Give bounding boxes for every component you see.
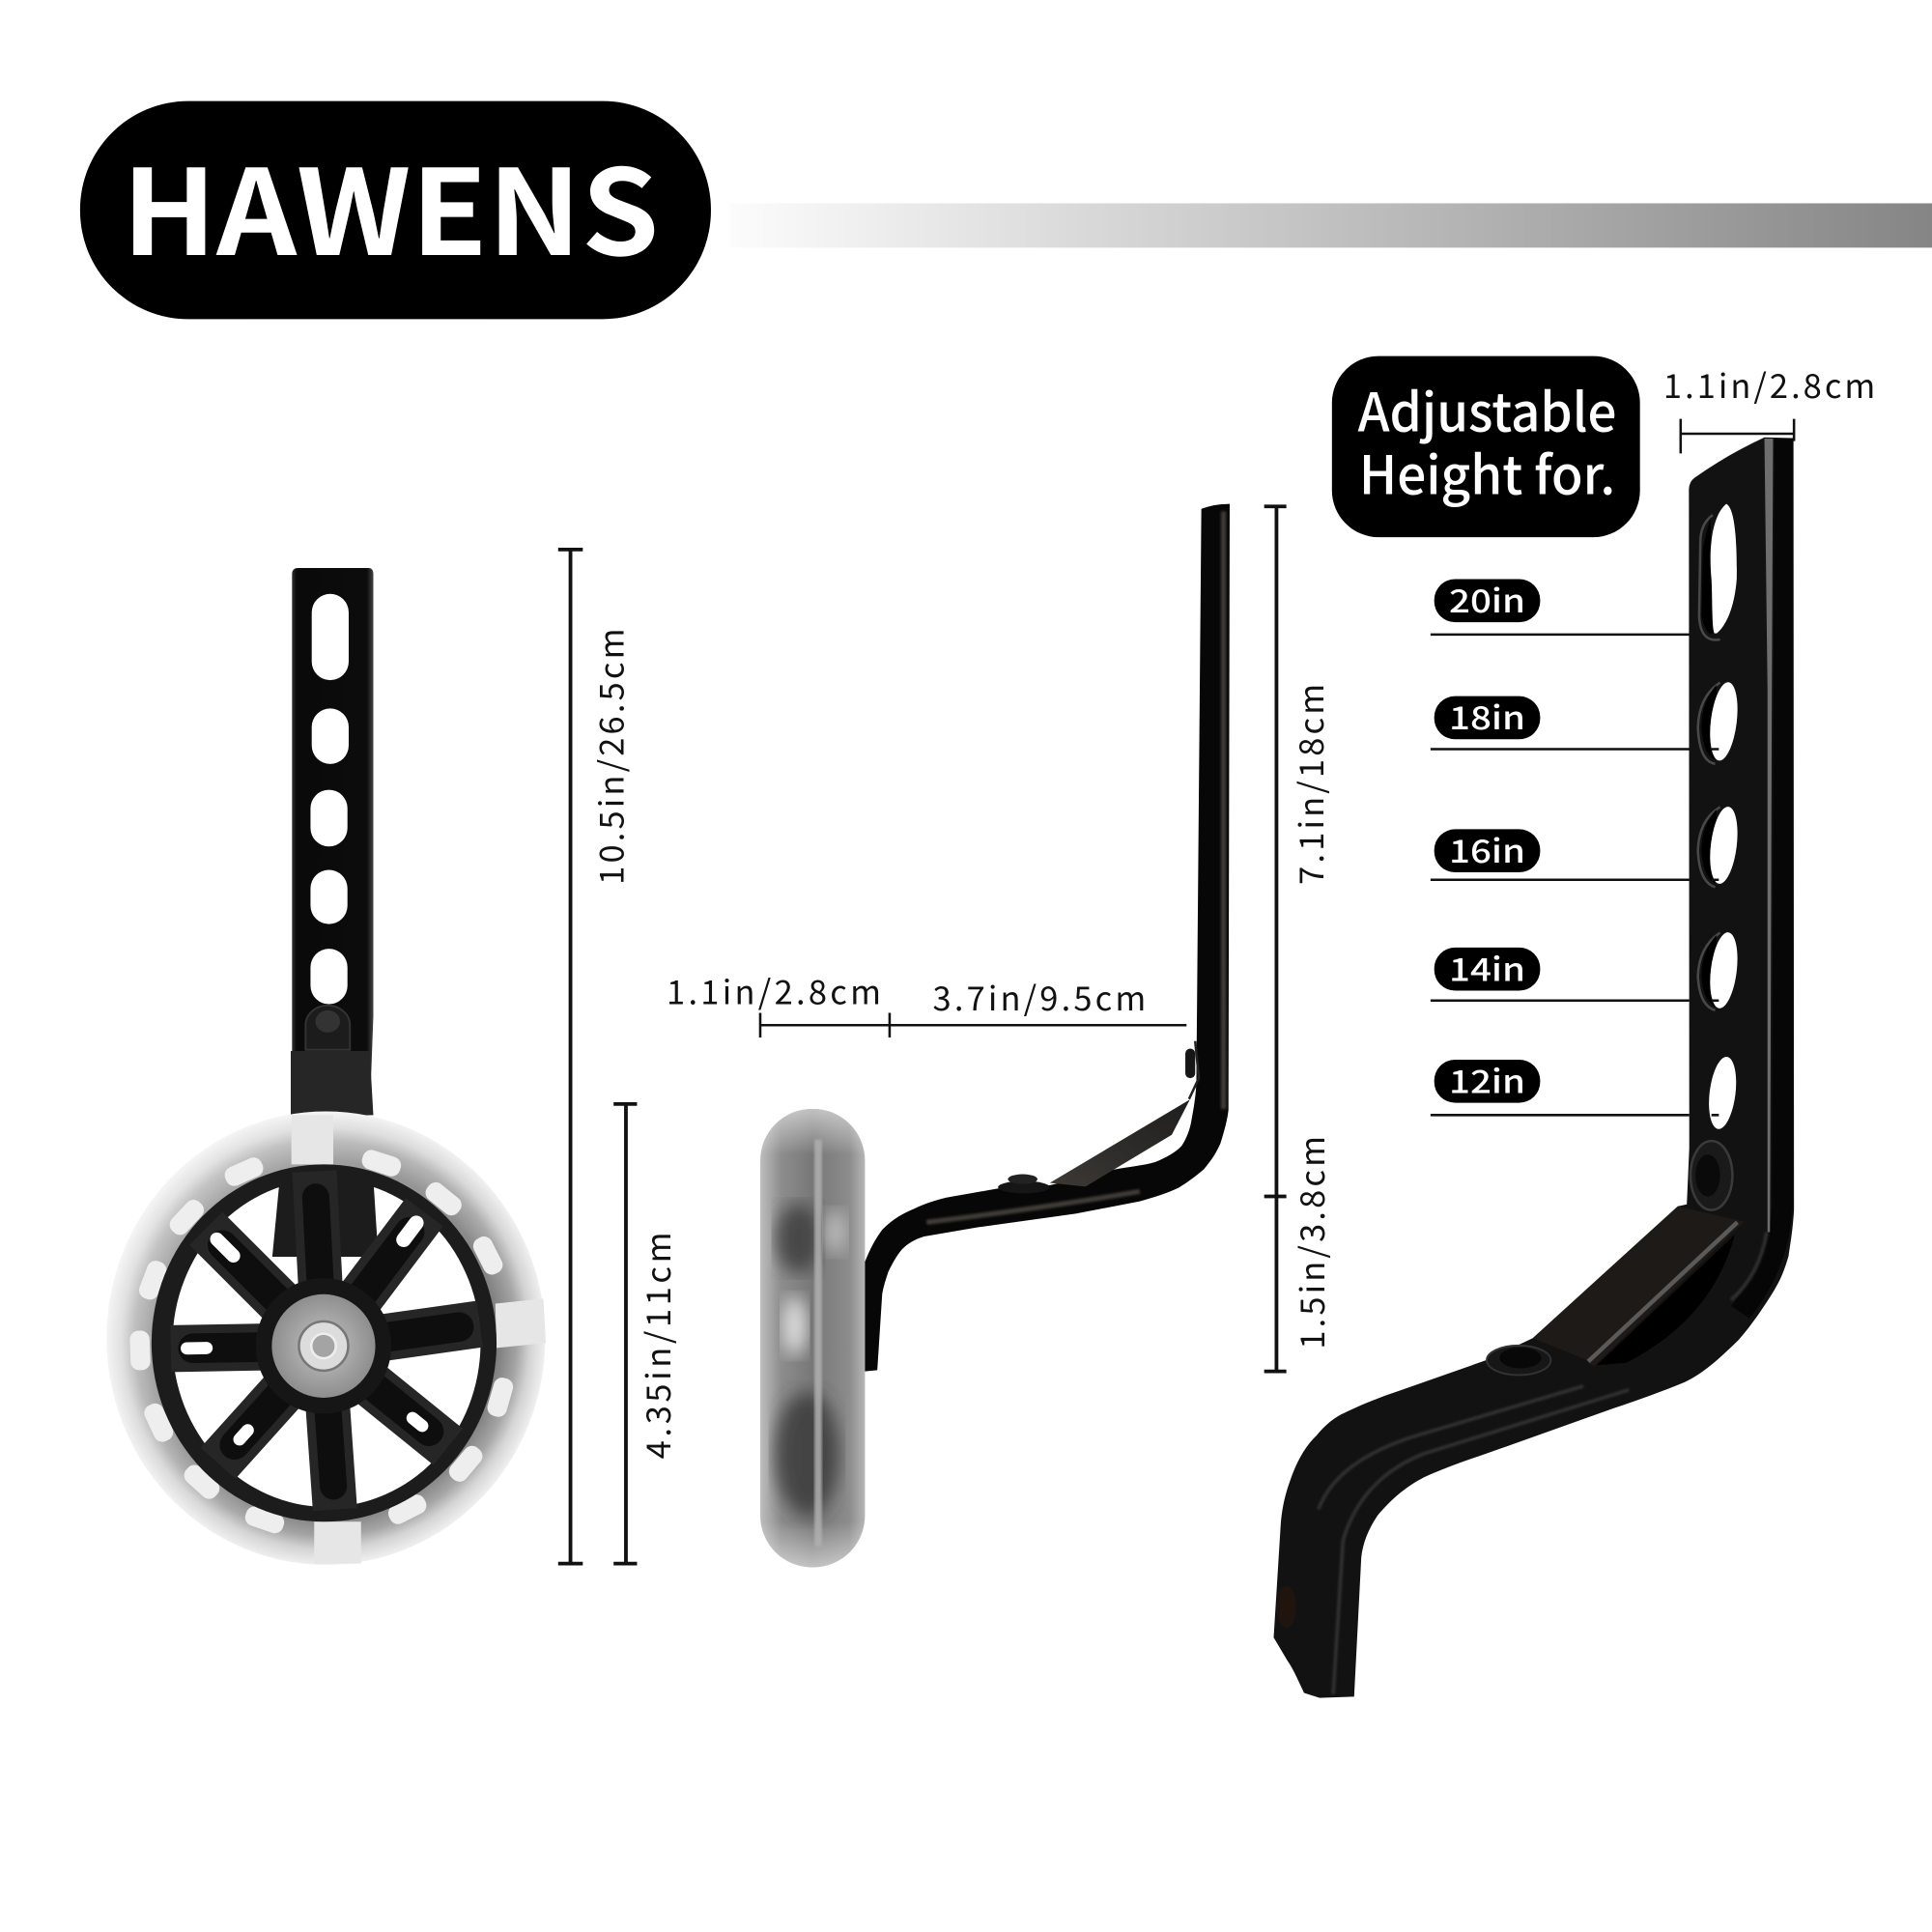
side view arm	[865, 504, 1230, 1372]
curved highlights	[1319, 1233, 1767, 1694]
upper bolt	[1185, 1041, 1199, 1099]
lower height label: 1.5in/3.8cm	[1286, 1136, 1334, 1350]
arm offset label: 3.7in/9.5cm	[933, 972, 1146, 1020]
height marker: 20in	[1431, 576, 1719, 635]
hole shadows	[1701, 518, 1717, 1007]
height marker: 12in: 12in	[1449, 1056, 1525, 1102]
height marker: 12in	[1431, 1056, 1719, 1115]
wheel diameter label: 4.35in/11cm	[632, 1233, 680, 1459]
arm width label: 1.1in/2.8cm	[1663, 359, 1875, 408]
hole walls	[1698, 515, 1720, 1010]
pivot bolt	[305, 1006, 350, 1050]
height marker: 16in: 16in	[1449, 826, 1525, 872]
plate edge highlight	[1588, 1222, 1737, 1361]
clear tyre	[106, 1112, 545, 1565]
spokes	[170, 1170, 483, 1511]
brand name: HAWENS	[122, 119, 659, 290]
hub	[256, 1278, 391, 1414]
height marker: 14in	[1431, 944, 1719, 1001]
callout: adjustable height: Height for.	[1359, 432, 1615, 509]
lower bolt head	[1499, 1348, 1542, 1368]
lower bracket block	[291, 1051, 373, 1115]
product: front view wheel and bracket	[106, 568, 546, 1565]
height marker: 14in: 14in	[1449, 944, 1525, 990]
height marker: 18in: 18in	[1449, 693, 1525, 739]
dimension: arm width	[1663, 359, 1875, 453]
upper height label: 7.1in/18cm	[1285, 684, 1333, 885]
height marker: 18in	[1431, 693, 1719, 750]
height marker: 16in	[1431, 826, 1719, 880]
product: enlarged arm	[1273, 438, 1794, 1698]
side view bolt	[998, 1175, 1050, 1193]
overall height label: 10.5in/26.5cm	[584, 629, 633, 885]
dark right edge	[1731, 439, 1793, 1319]
slotted bracket strap	[291, 568, 373, 1115]
axle nut	[298, 1321, 348, 1371]
bracket seen through rim	[272, 1179, 379, 1257]
product: side view wheel and arm	[760, 504, 1230, 1567]
black wedge under plate	[1597, 1235, 1735, 1365]
upper bolt collar	[1690, 1141, 1732, 1210]
arm highlights	[926, 511, 1224, 1222]
brand pill	[80, 101, 711, 319]
black rim	[152, 1164, 497, 1521]
height marker: 20in: 20in	[1449, 576, 1525, 622]
side view plate	[1050, 1099, 1190, 1186]
mounting hole	[1276, 1586, 1296, 1628]
light slots	[129, 1148, 515, 1536]
rim window	[173, 1179, 480, 1507]
tyre sheen	[106, 1112, 545, 1565]
vertical highlight	[1765, 439, 1773, 1233]
wheel	[106, 1112, 546, 1565]
enlarged arm body	[1273, 438, 1794, 1698]
dimension: arm heights	[1264, 506, 1334, 1372]
tyre width label: 1.1in/2.8cm	[667, 966, 881, 1014]
adjustment holes	[1705, 504, 1742, 1130]
plate	[1533, 1207, 1744, 1367]
gradient header bar	[729, 203, 1932, 247]
dimension: overall height	[558, 550, 633, 1564]
side view tyre	[760, 1109, 865, 1567]
callout: adjustable height: Adjustable	[1358, 369, 1616, 446]
lower bolt collar	[1487, 1346, 1550, 1375]
callout: adjustable height	[1332, 356, 1640, 537]
dimension: tyre width	[667, 966, 1186, 1037]
upper bolt head	[1695, 1154, 1720, 1197]
dimension: wheel diameter	[613, 1104, 680, 1564]
clear seams	[292, 1115, 546, 1564]
